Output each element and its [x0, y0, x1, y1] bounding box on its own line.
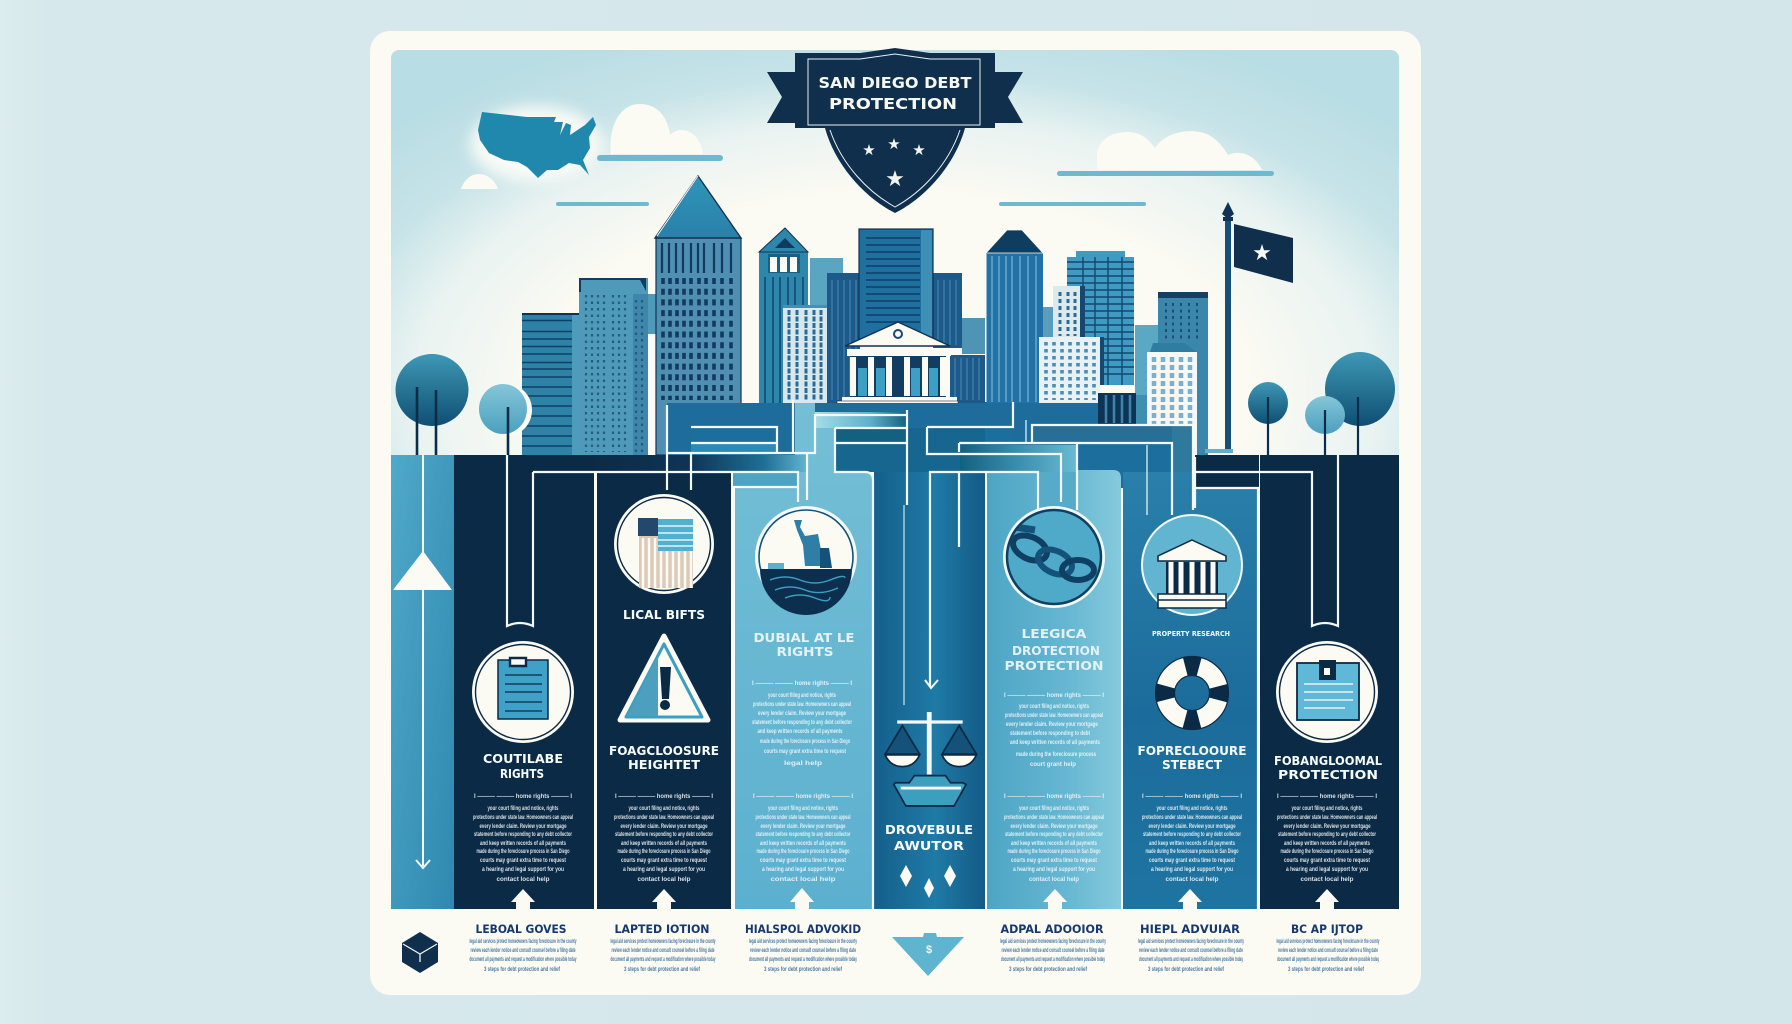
body text: and keep written records of all payments: [480, 840, 566, 847]
footer: appeal advisor: review each lender notice and consult counsel before a filing date: [1002, 947, 1105, 954]
footer: legal coves: LEBOAL GOVES: [476, 922, 566, 936]
body text bottom: a hearing and legal support for you: [1013, 866, 1095, 873]
column 5: legal protection: [960, 445, 1121, 909]
body text top: courts may grant extra time to request: [764, 748, 846, 755]
icon: notice board: [1276, 641, 1378, 743]
body text: a hearing and legal support for you: [1286, 866, 1368, 873]
icon: scales of justice: [885, 712, 976, 806]
body text: protections under state law. Homeowners can appeal: [614, 814, 714, 821]
heading: [885, 822, 973, 853]
footer: help advisor: review each lender notice and consult counsel before a filing date: [1139, 947, 1243, 954]
grid tower right: [1053, 251, 1134, 385]
arrow: [1043, 889, 1067, 909]
stars: ★: [885, 167, 905, 192]
heading: AWUTOR: [894, 838, 964, 853]
arrow: [1315, 889, 1339, 909]
icon: lifebuoy: [1156, 656, 1228, 730]
column 3: dual rights: [733, 403, 907, 909]
body text bottom: protections under state law. Homeowners can appeal: [756, 814, 851, 821]
heading: foreclosure: HEIGHTET: [628, 757, 700, 772]
text: legal aid services protect homeowners facing foreclosure in the county: [1276, 938, 1380, 945]
text: document all payments and request a modification where possible today: [1001, 956, 1105, 963]
heading: DROVEBULE: [885, 822, 973, 837]
text: document all payments and request a modification where possible today: [1277, 956, 1379, 963]
stars: ★: [912, 141, 926, 159]
white block right: [1039, 337, 1104, 403]
body text bottom: I ——— ——— home rights ——— I: [753, 793, 853, 800]
connector pipes: [533, 400, 1338, 909]
body text bottom: I ——— ——— home rights ——— I: [1004, 793, 1104, 800]
column 2: legal rights and foreclosure: [594, 455, 807, 909]
heading: LEEGICA: [1022, 626, 1087, 641]
footer: funnel icon: [892, 933, 964, 976]
flagpole and flag: [1205, 202, 1293, 453]
arrow: [1178, 889, 1202, 909]
body text: protections under state law. Homeowners can appeal: [1277, 814, 1377, 821]
body text bottom: and keep written records of all payments: [760, 840, 846, 847]
footer: lapted notion: [610, 922, 716, 973]
body text top: every lender claim. Review your mortgage: [758, 710, 846, 717]
stars: [862, 135, 926, 192]
heading: RIGHTS: [776, 644, 834, 659]
body text: and keep written records of all payments: [1149, 840, 1235, 847]
footer: be up top: review each lender notice and consult counsel before a filing date: [1278, 947, 1378, 954]
card: [370, 31, 1421, 995]
body text bottom: [1004, 793, 1104, 883]
footer: lapted notion: LAPTED IOTION: [614, 922, 710, 936]
body text top: I ——— ——— home rights ——— I: [1004, 692, 1104, 699]
body text top: [752, 680, 852, 767]
body text: and keep written records of all payments: [1284, 840, 1370, 847]
footer: hospital advocate: review each lender notice and consult counsel before a filing date: [750, 947, 856, 954]
body text bottom: made during the foreclosure process in San Diego: [756, 848, 850, 855]
footer: be up top: [1276, 922, 1380, 973]
body text: [614, 793, 714, 883]
heading: [483, 751, 563, 781]
body text: made during the foreclosure process in San Diego: [618, 848, 711, 855]
body text top: court grant help: [1030, 761, 1076, 768]
heading: DUBIAL AT LE: [754, 630, 854, 645]
text: document all payments and request a modification where possible today: [1139, 956, 1243, 963]
building far left: [522, 313, 583, 455]
body text: a hearing and legal support for you: [482, 866, 564, 873]
body text: your court filing and notice, rights: [628, 805, 700, 812]
body text: courts may grant extra time to request: [480, 857, 566, 864]
white apartments left: [783, 305, 827, 403]
body text bottom: protections under state law. Homeowners can appeal: [1004, 814, 1104, 821]
body text: I ——— ——— home rights ——— I: [615, 793, 713, 800]
body text: every lender claim. Review your mortgage: [1148, 823, 1236, 830]
footer: legal coves: [470, 922, 577, 973]
trees right: [1248, 352, 1395, 455]
body text bottom: your court filing and notice, rights: [768, 805, 838, 812]
column 1: court rights: [454, 455, 594, 909]
icon: warning triangle: [620, 636, 708, 720]
heading: FOBANGLOOMAL: [1274, 753, 1382, 768]
body text: [473, 793, 573, 883]
footer: legal coves: document all payments and request a modification where possible today: [470, 956, 577, 963]
body text top: protections under state law. Homeowners can appeal: [753, 701, 851, 708]
body text top: made during the foreclosure process: [1016, 751, 1096, 758]
body text: I ——— ——— home rights ——— I: [1142, 793, 1242, 800]
body text: your court filing and notice, rights: [1156, 805, 1228, 812]
body text bottom: every lender claim. Review your mortgage: [760, 823, 846, 830]
title: SAN DIEGO DEBT: [818, 74, 972, 92]
heading: [1274, 753, 1382, 782]
icon: chain: [1003, 506, 1105, 608]
centre striped tower: [859, 229, 933, 339]
heading: foreclosure: FOAGCLOOSURE: [609, 743, 719, 758]
body text: every lender claim. Review your mortgage: [480, 823, 567, 830]
courthouse: [837, 322, 958, 405]
body text: I ——— ——— home rights ——— I: [1277, 793, 1377, 800]
body text: a hearing and legal support for you: [1151, 866, 1233, 873]
icon: flag: [614, 494, 714, 594]
caption: PROPERTY RESEARCH: [1152, 630, 1230, 638]
clouds left: [461, 104, 723, 206]
white tower far right: [1147, 343, 1197, 457]
column 0: arrow strip: [391, 455, 454, 909]
column 6: foreclosure street: [1078, 425, 1259, 909]
subtitle: PROTECTION: [829, 95, 957, 113]
footer: help advisor: legal aid services protect homeowners facing foreclosure in the county: [1138, 938, 1244, 945]
icon: statue of liberty: [755, 506, 857, 615]
body text: your court filing and notice, rights: [1292, 805, 1363, 812]
body text: your court filing and notice, rights: [488, 805, 559, 812]
footer: legal coves: 3 steps for debt protection and relief: [484, 966, 561, 973]
body text top: legal help: [784, 760, 822, 767]
body text: statement before responding to any debt collector: [1278, 831, 1376, 838]
platform: [667, 403, 1193, 472]
body text bottom: made during the foreclosure process in San Diego: [1008, 848, 1101, 855]
body text bottom: [753, 793, 853, 883]
dark tower right of centre: [985, 230, 1043, 403]
body text: made during the foreclosure process in San Diego: [1280, 848, 1374, 855]
footer: hospital advocate: document all payments and request a modification where possible today: [749, 956, 857, 963]
body text: statement before responding to any debt collector: [1143, 831, 1241, 838]
body text bottom: statement before responding to any debt collector: [756, 831, 851, 838]
trees left: [396, 354, 532, 455]
footer: hospital advocate: legal aid services protect homeowners facing foreclosure in the county: [749, 938, 857, 945]
body text top: statement before responding to any debt collector: [752, 719, 852, 726]
footer: be up top: BC AP IJTOP: [1291, 922, 1363, 936]
footer: cube icon: [402, 932, 438, 973]
body text top: and keep written records of all payments: [758, 728, 843, 735]
body text: statement before responding to any debt collector: [474, 831, 572, 838]
body text bottom: a hearing and legal support for you: [762, 866, 844, 873]
flagpole and flag: ★: [1252, 241, 1272, 266]
body text top: made during the foreclosure process in San Diego: [760, 738, 850, 745]
illustration: skyline scene: [396, 104, 1395, 472]
column 4: provable advisor: [835, 428, 987, 909]
heading: RIGHTS: [500, 766, 544, 781]
footer: help advisor: HIEPL ADVUIAR: [1140, 922, 1240, 936]
footer: legal coves: review each lender notice and consult counsel before a filing date: [470, 947, 576, 954]
body text: courts may grant extra time to request: [1149, 857, 1235, 864]
body text bottom: statement before responding to any debt collector: [1005, 831, 1103, 838]
body text: statement before responding to any debt collector: [615, 831, 713, 838]
heading: PROTECTION: [1278, 767, 1378, 782]
shield badge: [767, 48, 1023, 213]
body text top: and keep written records of all payments: [1010, 739, 1100, 746]
heading: [1138, 743, 1246, 772]
body text top: your court filing and notice, rights: [1019, 703, 1089, 710]
body text bottom: contact local help: [1029, 876, 1079, 883]
heading: [754, 630, 854, 659]
body text bottom: contact local help: [770, 876, 836, 883]
body text: courts may grant extra time to request: [621, 857, 707, 864]
map of the USA: [470, 106, 602, 182]
body text top: every lender claim. Review your mortgage: [1006, 721, 1098, 728]
body text: [1277, 793, 1377, 883]
tower with window roof: [759, 228, 808, 403]
clouds right: [999, 131, 1274, 206]
body text: made during the foreclosure process in San Diego: [476, 848, 570, 855]
sky panel: [391, 50, 1399, 456]
footer: hospital advocate: 3 steps for debt protection and relief: [764, 966, 843, 973]
body text top: protections under state law. Homeowners can appeal: [1005, 712, 1103, 719]
body text bottom: courts may grant extra time to request: [1011, 857, 1097, 864]
body text: [1142, 793, 1242, 883]
body text: contact local help: [1166, 876, 1219, 883]
body text: protections under state law. Homeowners can appeal: [1142, 814, 1242, 821]
body text: a hearing and legal support for you: [623, 866, 705, 873]
body text bottom: your court filing and notice, rights: [1019, 805, 1089, 812]
arrow: [511, 889, 535, 909]
body text top: statement before responding to debt: [1010, 730, 1090, 737]
column 7: foundational protection: [1260, 455, 1399, 909]
icon: clipboard: [472, 641, 574, 743]
footer: be up top: 3 steps for debt protection and relief: [1288, 966, 1365, 973]
body text: contact local help: [1300, 876, 1354, 883]
body text: courts may grant extra time to request: [1284, 857, 1370, 864]
heading: DROTECTION: [1012, 643, 1100, 658]
back buildings: [810, 258, 1159, 405]
body text: I ——— ——— home rights ——— I: [474, 793, 572, 800]
heading: COUTILABE: [483, 751, 563, 766]
footer: legal coves: legal aid services protect homeowners facing foreclosure in the county: [470, 938, 577, 945]
body text top: I ——— ——— home rights ——— I: [752, 680, 852, 687]
body text: every lender claim. Review your mortgage: [620, 823, 708, 830]
footer: appeal advisor: [1000, 922, 1106, 973]
body text: contact local help: [638, 876, 691, 883]
body text top: [1004, 692, 1104, 768]
building with small windows: [579, 278, 656, 455]
heading: FOPRECLOOURE: [1138, 743, 1246, 758]
footer: lapted notion: review each lender notice and consult counsel before a filing date: [612, 947, 715, 954]
footer: hospital advocate: HIALSPOL ADVOKID: [745, 922, 861, 936]
body text bottom: and keep written records of all payments: [1011, 840, 1097, 847]
heading: STEBECT: [1162, 757, 1222, 772]
stars: ★: [887, 135, 901, 153]
stars: ★: [862, 141, 876, 159]
arrow: [790, 888, 814, 909]
heading: legal rights: LICAL BIFTS: [623, 607, 705, 622]
sparkles: [900, 865, 956, 898]
tower far right: [1098, 292, 1208, 457]
icon: temple: [1142, 515, 1242, 615]
heading: PROTECTION: [1004, 658, 1104, 673]
body text top: your court filing and notice, rights: [768, 692, 836, 699]
footer: appeal advisor: 3 steps for debt protection and relief: [1009, 966, 1088, 973]
footer: lapted notion: legal aid services protect homeowners facing foreclosure in the county: [610, 938, 716, 945]
heading: foreclosure: [609, 743, 719, 772]
body text: and keep written records of all payments: [621, 840, 707, 847]
arrow: [652, 889, 676, 909]
footer: lapted notion: 3 steps for debt protection and relief: [624, 966, 701, 973]
footer: appeal advisor: legal aid services protect homeowners facing foreclosure in the county: [1000, 938, 1106, 945]
footer: help advisor: [1138, 922, 1244, 973]
footer: funnel icon: $: [926, 944, 932, 956]
body text bottom: every lender claim. Review your mortgage: [1010, 823, 1098, 830]
footer: help advisor: 3 steps for debt protection and relief: [1148, 966, 1225, 973]
body text: made during the foreclosure process in San Diego: [1146, 848, 1239, 855]
footer: appeal advisor: ADPAL ADOOIOR: [1000, 922, 1104, 936]
body text: protections under state law. Homeowners can appeal: [473, 814, 573, 821]
tall tower with roof: [655, 176, 741, 455]
text: document all payments and request a modification where possible today: [610, 956, 716, 963]
body text: contact local help: [496, 876, 550, 883]
body text bottom: courts may grant extra time to request: [760, 857, 846, 864]
heading: [1004, 626, 1104, 673]
body text: every lender claim. Review your mortgage: [1284, 823, 1371, 830]
footer: hospital advocate: [745, 922, 861, 973]
